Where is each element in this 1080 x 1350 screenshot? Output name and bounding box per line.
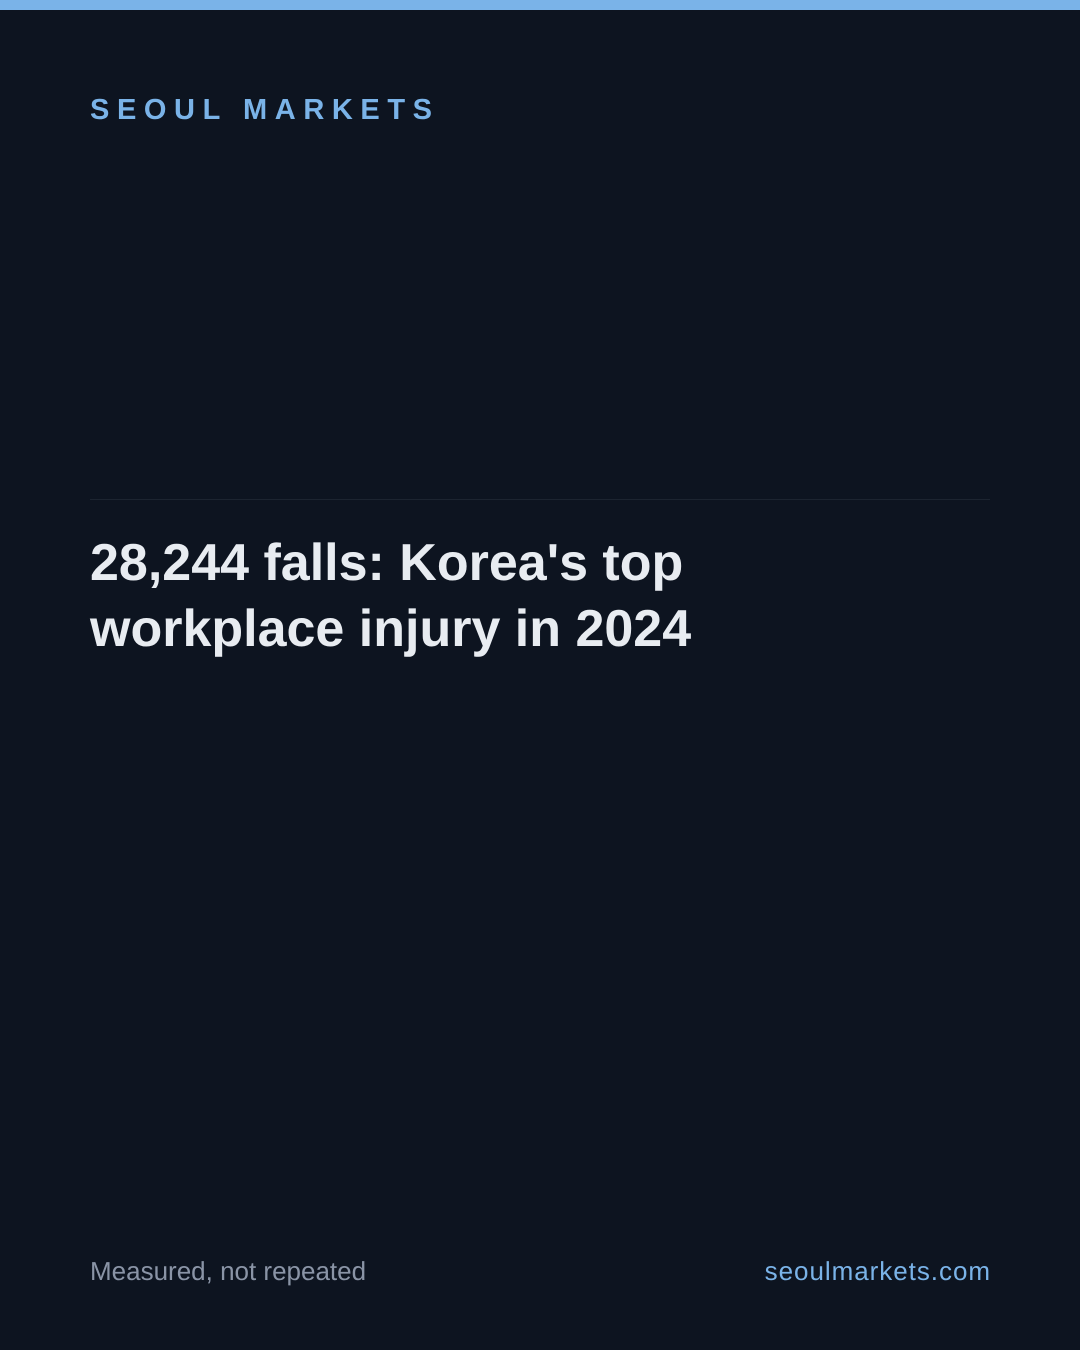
headline: 28,244 falls: Korea's top [90, 534, 683, 592]
footer website: seoulmarkets.com [765, 1256, 991, 1286]
brand name: SEOUL MARKETS [90, 94, 440, 126]
divider line [90, 499, 990, 500]
headline: workplace injury in 2024 [90, 600, 691, 658]
headline [90, 534, 691, 658]
top accent bar [0, 0, 1080, 10]
footer tagline: Measured, not repeated [90, 1256, 366, 1286]
